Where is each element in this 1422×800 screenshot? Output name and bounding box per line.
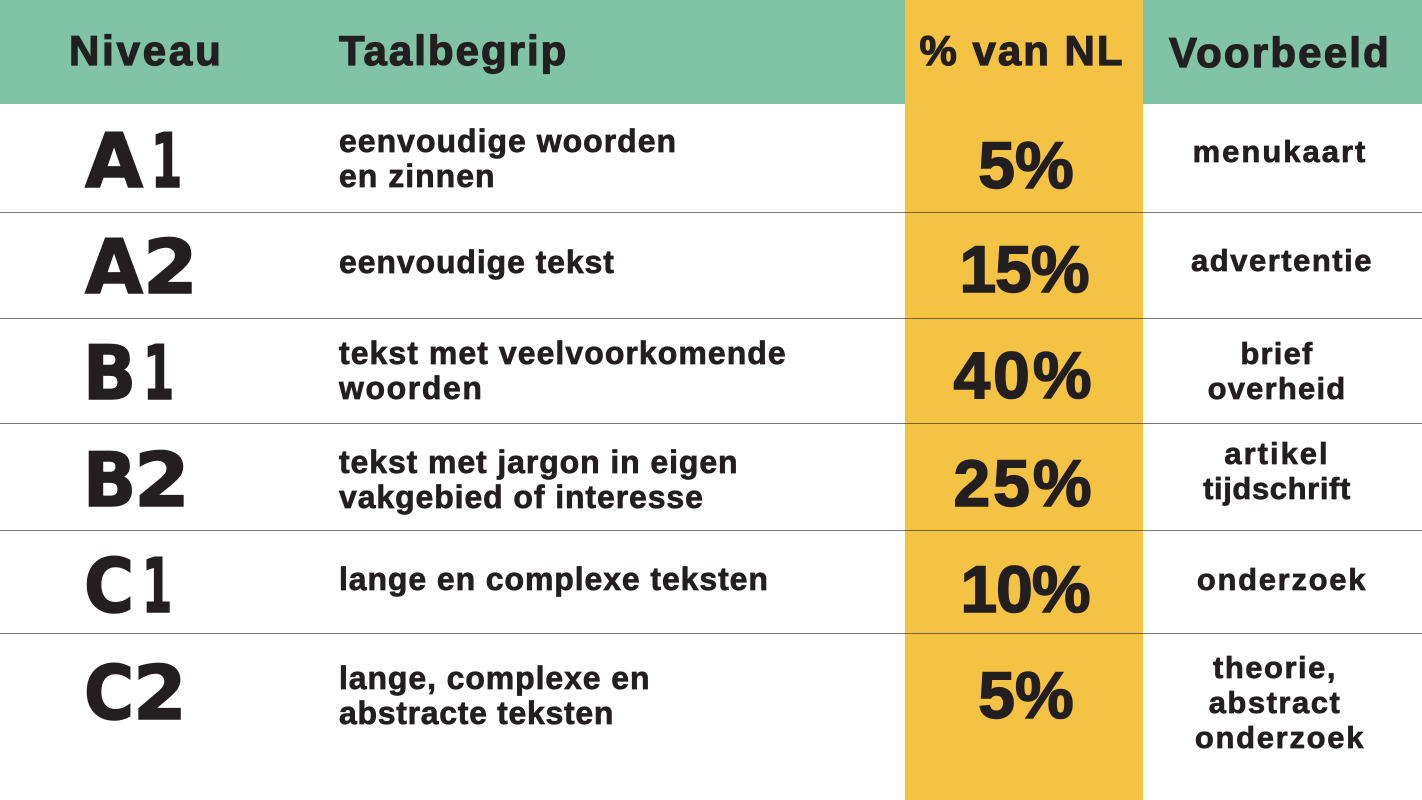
percentage C2: 5% bbox=[978, 658, 1074, 732]
example B2: tijdschrift bbox=[1203, 471, 1351, 506]
level C1: 1 bbox=[142, 542, 172, 630]
description B2: tekst met jargon in eigen bbox=[339, 444, 738, 480]
header band bbox=[0, 0, 1422, 104]
description C2 bbox=[339, 660, 650, 731]
level C1: C bbox=[84, 542, 134, 630]
heading: Taalbegrip: Taalbegrip bbox=[339, 27, 568, 74]
example B2 bbox=[1203, 436, 1351, 506]
heading: Voorbeeld: Voorbeeld bbox=[1169, 29, 1391, 76]
example B1: overheid bbox=[1208, 371, 1346, 406]
level A2: 2 bbox=[143, 223, 198, 311]
percentage B2: 25% bbox=[953, 446, 1095, 520]
description C1: lange en complexe teksten bbox=[339, 561, 769, 597]
example C2: abstract bbox=[1209, 685, 1341, 720]
level B1 bbox=[83, 329, 174, 417]
level C2: 2 bbox=[133, 649, 187, 737]
description B2: vakgebied of interesse bbox=[339, 479, 704, 515]
level A1: A bbox=[85, 117, 143, 205]
percentage B1: 40% bbox=[953, 338, 1095, 412]
example B1: brief bbox=[1240, 336, 1314, 371]
example B1 bbox=[1208, 336, 1346, 406]
example C2 bbox=[1195, 650, 1365, 755]
example C2: theorie, bbox=[1213, 650, 1337, 685]
description A1: eenvoudige woorden bbox=[339, 123, 677, 159]
level B2 bbox=[83, 436, 190, 524]
level A1: 1 bbox=[151, 117, 182, 205]
heading: % van NL: % van NL bbox=[919, 27, 1125, 74]
level B1: B bbox=[83, 329, 136, 417]
description A1 bbox=[339, 123, 677, 194]
level B1: 1 bbox=[143, 329, 174, 417]
example A2: advertentie bbox=[1191, 243, 1373, 278]
heading: Niveau: Niveau bbox=[69, 27, 224, 74]
level A2 bbox=[84, 223, 198, 311]
percentage A2: 15% bbox=[959, 232, 1089, 306]
level C1 bbox=[84, 542, 172, 630]
level A2: A bbox=[85, 223, 143, 311]
level B2: B bbox=[83, 436, 136, 524]
description B2 bbox=[338, 444, 738, 515]
description A2: eenvoudige tekst bbox=[339, 244, 615, 280]
example B2: artikel bbox=[1224, 436, 1330, 471]
level C2 bbox=[84, 649, 187, 737]
description B1 bbox=[338, 335, 787, 406]
example A1: menukaart bbox=[1193, 134, 1367, 169]
description A1: en zinnen bbox=[339, 158, 496, 194]
percentage C1: 10% bbox=[960, 552, 1090, 626]
description B1: woorden bbox=[339, 370, 484, 406]
percentage column bbox=[905, 0, 1143, 800]
example C2: onderzoek bbox=[1195, 720, 1365, 755]
example C1: onderzoek bbox=[1197, 562, 1367, 597]
level B2: 2 bbox=[134, 436, 190, 524]
description C2: abstracte teksten bbox=[339, 695, 614, 731]
description B1: tekst met veelvoorkomende bbox=[339, 335, 787, 371]
level A1 bbox=[84, 117, 182, 205]
description C2: lange, complexe en bbox=[339, 660, 650, 696]
percentage A1: 5% bbox=[978, 128, 1074, 202]
level C2: C bbox=[84, 649, 134, 737]
